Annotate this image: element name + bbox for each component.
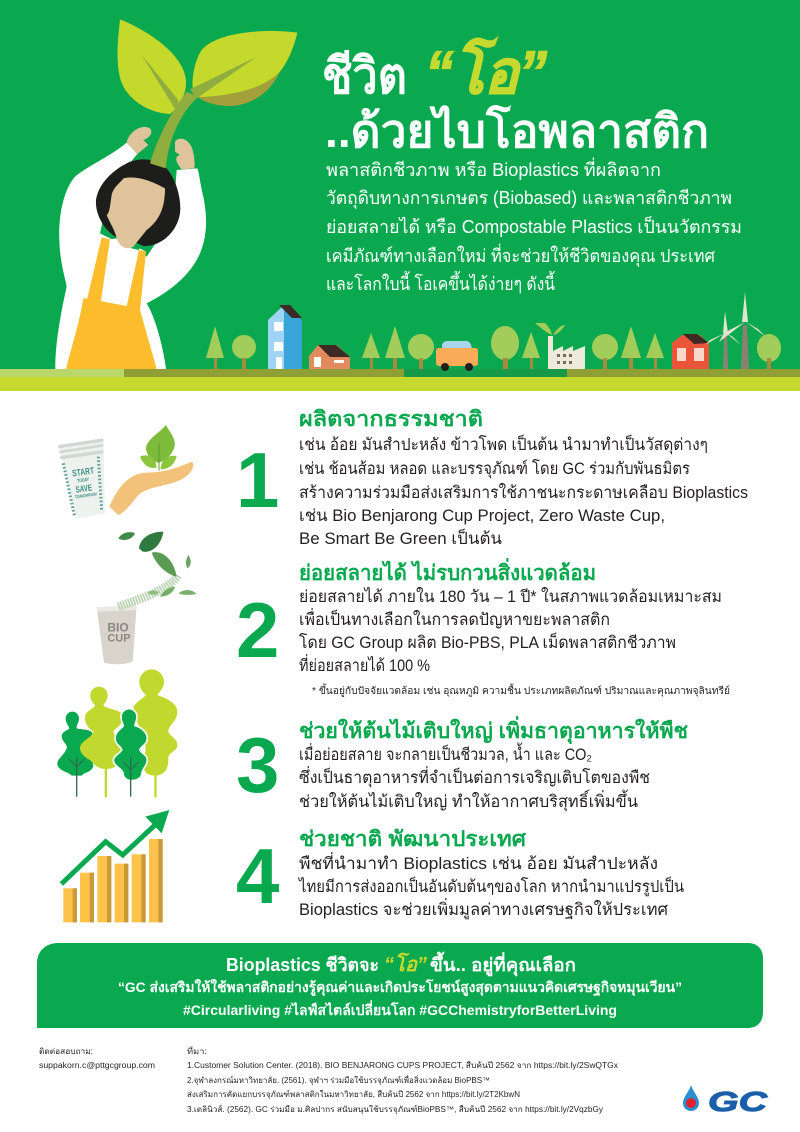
panel: green header [0, 0, 800, 391]
intro paragraph: เคมีภัณฑ์ทางเลือกใหม่ ที่จะช่วยให้ชีวิตของคุณ ประเทศ [326, 243, 716, 267]
section 2 text: ที่ย่อยสลายได้ 100 % [299, 654, 430, 675]
illustration 1: paper cups and hand with seedling: START [72, 466, 95, 478]
section 4 text: พืชที่นำมาทำ Bioplastics เช่น อ้อย มันสำปะหลัง [299, 852, 658, 873]
section 2 text: ย่อยสลายได้ ภายใน 180 วัน – 1 ปี* ในสภาพแวดล้อมเหมาะสม [299, 587, 722, 606]
references block: 2.จุฬาลงกรณ์มหาวิทยาลัย. (2561). จุฬาฯ ร่วมมือใช้บรรจุภัณฑ์เพื่อสิ่งแวดล้อม BioPBS™ [187, 1074, 490, 1085]
references block: ส่งเสริมการคัดแยกบรรจุภัณฑ์พลาสติกในมหาวิทยาลัย, สืบค้นปี 2562 จาก https://bit.ly/2T2KbwN [187, 1089, 520, 1099]
illustration: person holding sprout [55, 19, 297, 369]
intro paragraph: และโลกใบนี้ โอเคขึ้นได้ง่ายๆ ดังนี้ [326, 271, 555, 294]
number 4: 4 [236, 832, 279, 920]
number 3: 3 [236, 721, 279, 809]
panel: green call to action banner [37, 943, 763, 1028]
section 4 text [297, 828, 684, 920]
section 1 text: เช่น ช้อนส้อม หลอด และบรรจุภัณฑ์ โดย GC ร่วมกับพันธมิตร [299, 459, 690, 479]
intro paragraph: ย่อยสลายได้ หรือ Compostable Plastics เป็นนวัตกรรม [326, 215, 742, 237]
title: “โอ” [425, 37, 547, 106]
section 4 text: ช่วยชาติ พัฒนาประเทศ [299, 828, 527, 851]
references block: 1.Customer Solution Center. (2018). BIO BENJARONG CUPS PROJECT, สืบค้นปี 2562 จาก https://bit.ly/2SwQTGx [187, 1061, 618, 1070]
section 3 text: ช่วยให้ต้นไม้เติบใหญ่ ทำให้อากาศบริสุทธิ์เพิ่มขึ้น [299, 789, 638, 812]
logo: GC: GC [708, 1086, 768, 1117]
section 2 text: เพื่อเป็นทางเลือกในการลดปัญหาขยะพลาสติก [299, 608, 610, 629]
contact block [39, 1047, 155, 1070]
number 1: 1 [236, 436, 279, 524]
section 2 text [299, 557, 730, 697]
intro paragraph: พลาสติกชีวภาพ หรือ Bioplastics ที่ผลิตจาก [326, 157, 661, 180]
title: ..ด้วยไบโอพลาสติก [325, 104, 709, 157]
section 2 text: ย่อยสลายได้ ไม่รบกวนสิ่งแวดล้อม [299, 557, 596, 585]
section 1 text [299, 408, 748, 548]
section 1 text: Be Smart Be Green เป็นต้น [299, 528, 502, 548]
section 3 text: ซึ่งเป็นธาตุอาหารที่จำเป็นต่อการเจริญเติบโตของพืช [299, 766, 650, 788]
section 1 text: ผลิตจากธรรมชาติ [299, 408, 483, 431]
section 3 text: เมื่อย่อยสลาย จะกลายเป็นชีวมวล, น้ำ และ CO₂ [299, 742, 592, 764]
section 1 text: เช่น อ้อย มันสำปะหลัง ข้าวโพด เป็นต้น นำมาทำเป็นวัสดุต่างๆ [299, 434, 708, 455]
contact block: ติดต่อสอบถาม: [39, 1047, 93, 1056]
section 1 text: สร้างความร่วมมือส่งเสริมการใช้ภาชนะกระดาษเคลือบ Bioplastics [299, 483, 748, 502]
number 2: 2 [236, 586, 279, 674]
illustration 1: paper cups and hand with seedling: TODAY [77, 477, 90, 484]
panel: green call to action banner: Bioplastics ชีวิตจะ [226, 955, 379, 975]
references block: 3.เดลินิวส์. (2562). GC ร่วมมือ ม.ศิลปากร สนับสนุนใช้บรรจุภัณฑ์BioPBS™, สืบค้นปี 2562 จาก https://bit.ly/2VqzbGy [187, 1104, 603, 1114]
logo: GC [683, 1085, 768, 1117]
section 2 text: * ขึ้นอยู่กับปัจจัยแวดล้อม เช่น อุณหภูมิ ความชื้น ประเภทผลิตภัณฑ์ ปริมาณและคุณภาพจุลินทรีย์ [312, 683, 730, 697]
section 4 text: Bioplastics จะช่วยเพิ่มมูลค่าทางเศรษฐกิจให้ประเทศ [299, 898, 669, 920]
panel: green call to action banner: “GC ส่งเสริมให้ใช้พลาสติกอย่างรู้คุณค่าและเกิดประโยชน์สูงสุดตามแนวคิดเศรษฐกิจหมุนเวียน” [118, 978, 682, 997]
references block: ที่มา: [187, 1045, 207, 1056]
section 2 text: โดย GC Group ผลิต Bio-PBS, PLA เม็ดพลาสติกชีวภาพ [299, 632, 676, 652]
references block [187, 1045, 618, 1114]
illustration 2: bio cup with leaves: BIO [107, 621, 129, 635]
illustration 2: bio cup with leaves [97, 532, 197, 664]
title [322, 37, 709, 157]
section 3 text [299, 715, 688, 812]
illustration 1: paper cups and hand with seedling [58, 425, 193, 518]
illustration 4: rising bar chart with arrow [61, 810, 169, 922]
contact block: suppakorn.c@pttgcgroup.com [39, 1061, 155, 1070]
panel: green call to action banner: “โอ” [384, 952, 427, 976]
intro paragraph [326, 157, 742, 294]
illustration 1: paper cups and hand with seedling: TOMORROW [75, 491, 98, 499]
illustration: town skyline [206, 292, 781, 371]
section 1 text: เช่น Bio Benjarong Cup Project, Zero Waste Cup, [299, 507, 665, 525]
illustration 1: paper cups and hand with seedling: SAVE [75, 482, 93, 495]
title: ชีวิต [322, 48, 407, 104]
panel: green call to action banner: #Circularliving #ไลฟ์สไตล์เปลี่ยนโลก #GCChemistryforBetterLiving [183, 1000, 617, 1018]
intro paragraph: วัตถุดิบทางการเกษตร (Biobased) และพลาสติกชีวภาพ [326, 188, 732, 209]
illustration 3: trees [57, 669, 177, 797]
panel: green call to action banner: ขึ้น.. อยู่ที่คุณเลือก [430, 951, 576, 977]
illustration 2: bio cup with leaves: CUP [107, 633, 131, 645]
section 4 text: ไทยมีการส่งออกเป็นอันดับต้นๆของโลก หากนำมาแปรรูปเป็น [297, 876, 684, 897]
section 3 text: ช่วยให้ต้นไม้เติบใหญ่ เพิ่มธาตุอาหารให้พืช [299, 715, 688, 745]
